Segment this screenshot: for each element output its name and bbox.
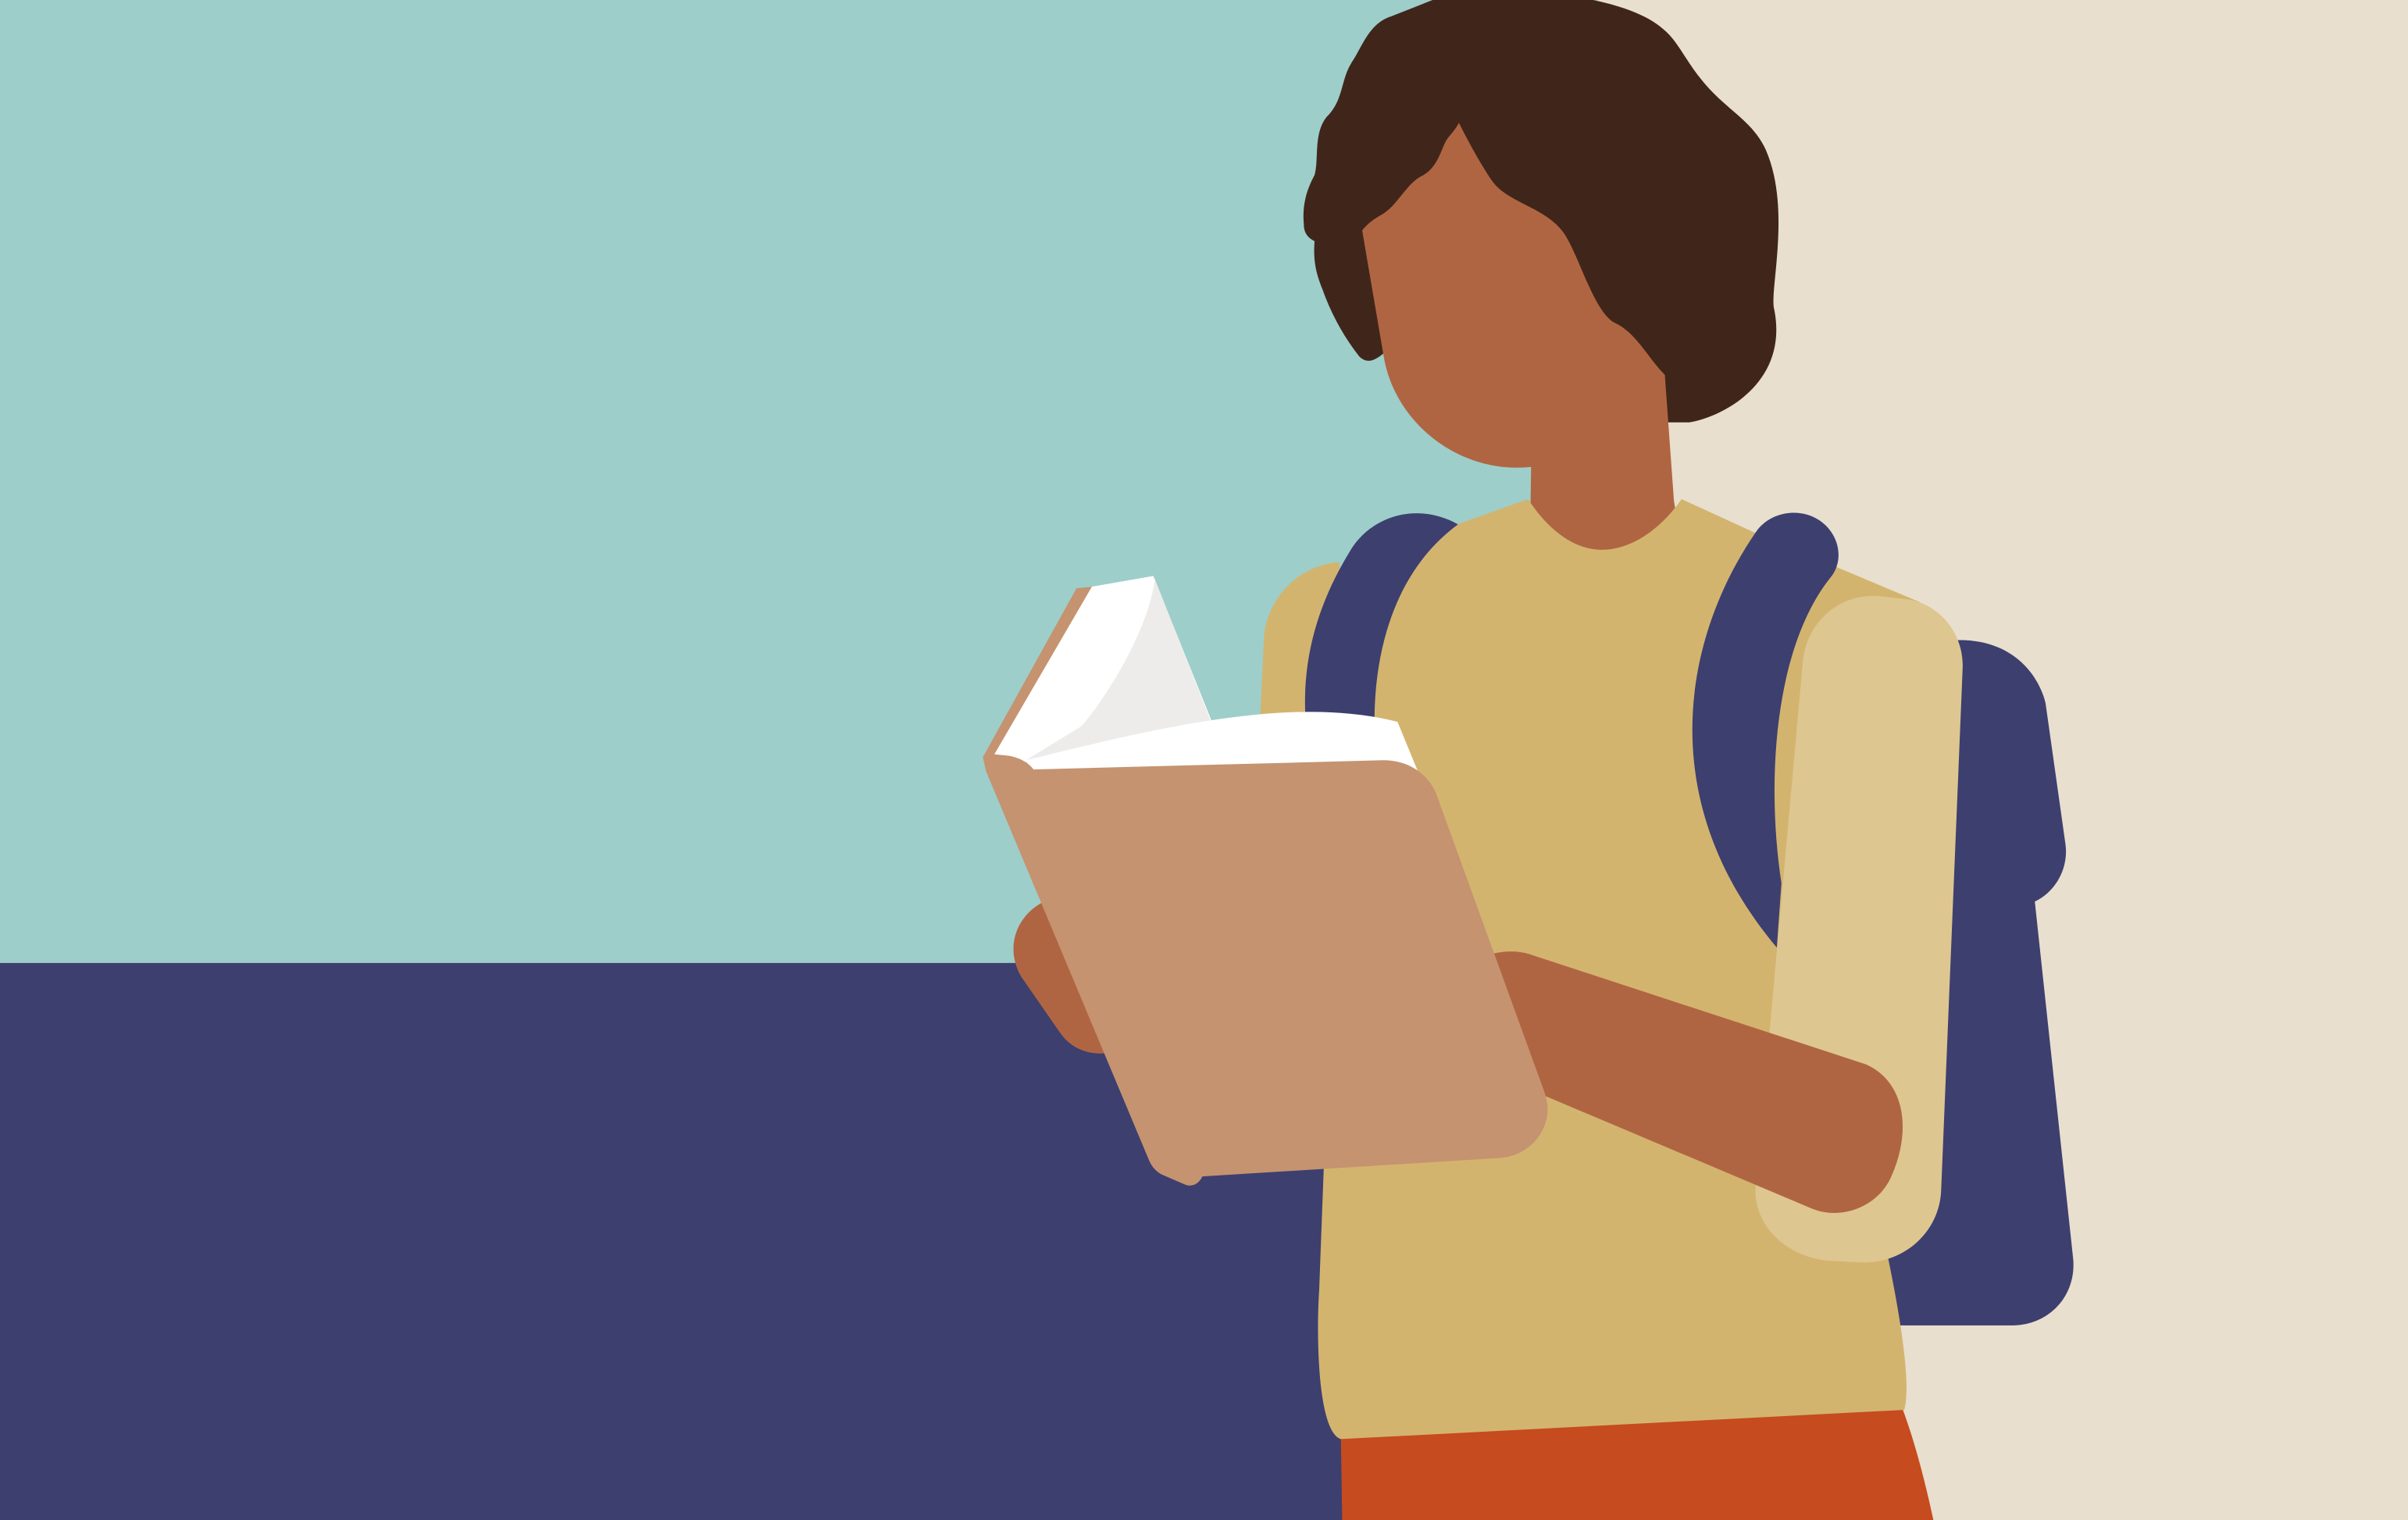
head and neck — [1362, 92, 1685, 569]
hair: fringe — [1333, 0, 1766, 423]
backpack body — [1874, 640, 2074, 1326]
book: front cover — [983, 754, 1547, 1186]
trousers — [1340, 1405, 1933, 1520]
book: curled page — [1026, 579, 1211, 760]
book: back cover edge — [983, 587, 1093, 760]
background: navy panel — [0, 963, 1597, 1520]
shirt — [1318, 499, 1950, 1439]
left backpack strap — [1305, 513, 1462, 722]
right forearm — [1493, 951, 1903, 1213]
book: white right page — [1026, 712, 1419, 774]
book: white left page — [994, 576, 1213, 763]
hair: back — [1304, 0, 1778, 423]
open book — [983, 576, 1547, 1186]
right sleeve — [1755, 596, 1963, 1262]
left hand — [1014, 903, 1113, 1054]
left sleeve — [1259, 562, 1351, 752]
background: teal panel — [0, 0, 1597, 963]
right backpack strap — [1693, 512, 1839, 947]
